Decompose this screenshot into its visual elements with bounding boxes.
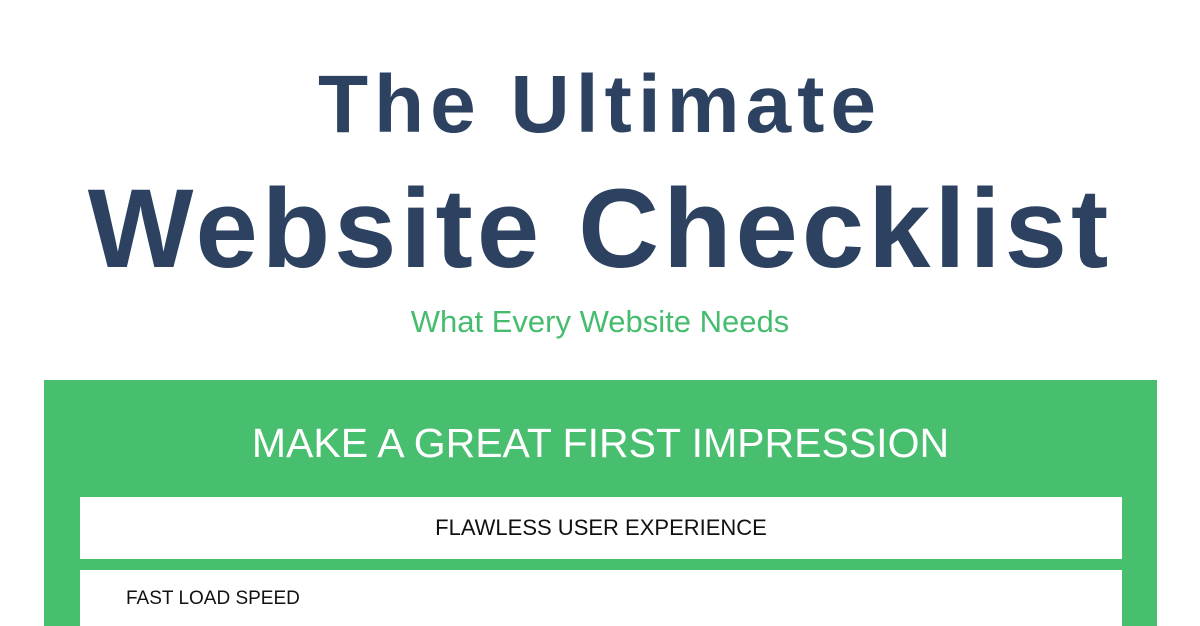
box: flawless user experience — [80, 497, 1122, 559]
panel heading: MAKE A GREAT FIRST IMPRESSION — [252, 420, 949, 466]
box: fast load speed: FAST LOAD SPEED — [126, 588, 300, 609]
title line 1: The Ultimate — [318, 59, 882, 150]
box: fast load speed — [80, 570, 1122, 626]
title line 2: Website Checklist — [88, 166, 1112, 291]
box: flawless user experience: FLAWLESS USER EXPERIENCE — [435, 515, 767, 540]
subtitle: What Every Website Needs — [411, 304, 789, 339]
panel: first impression — [44, 380, 1157, 626]
